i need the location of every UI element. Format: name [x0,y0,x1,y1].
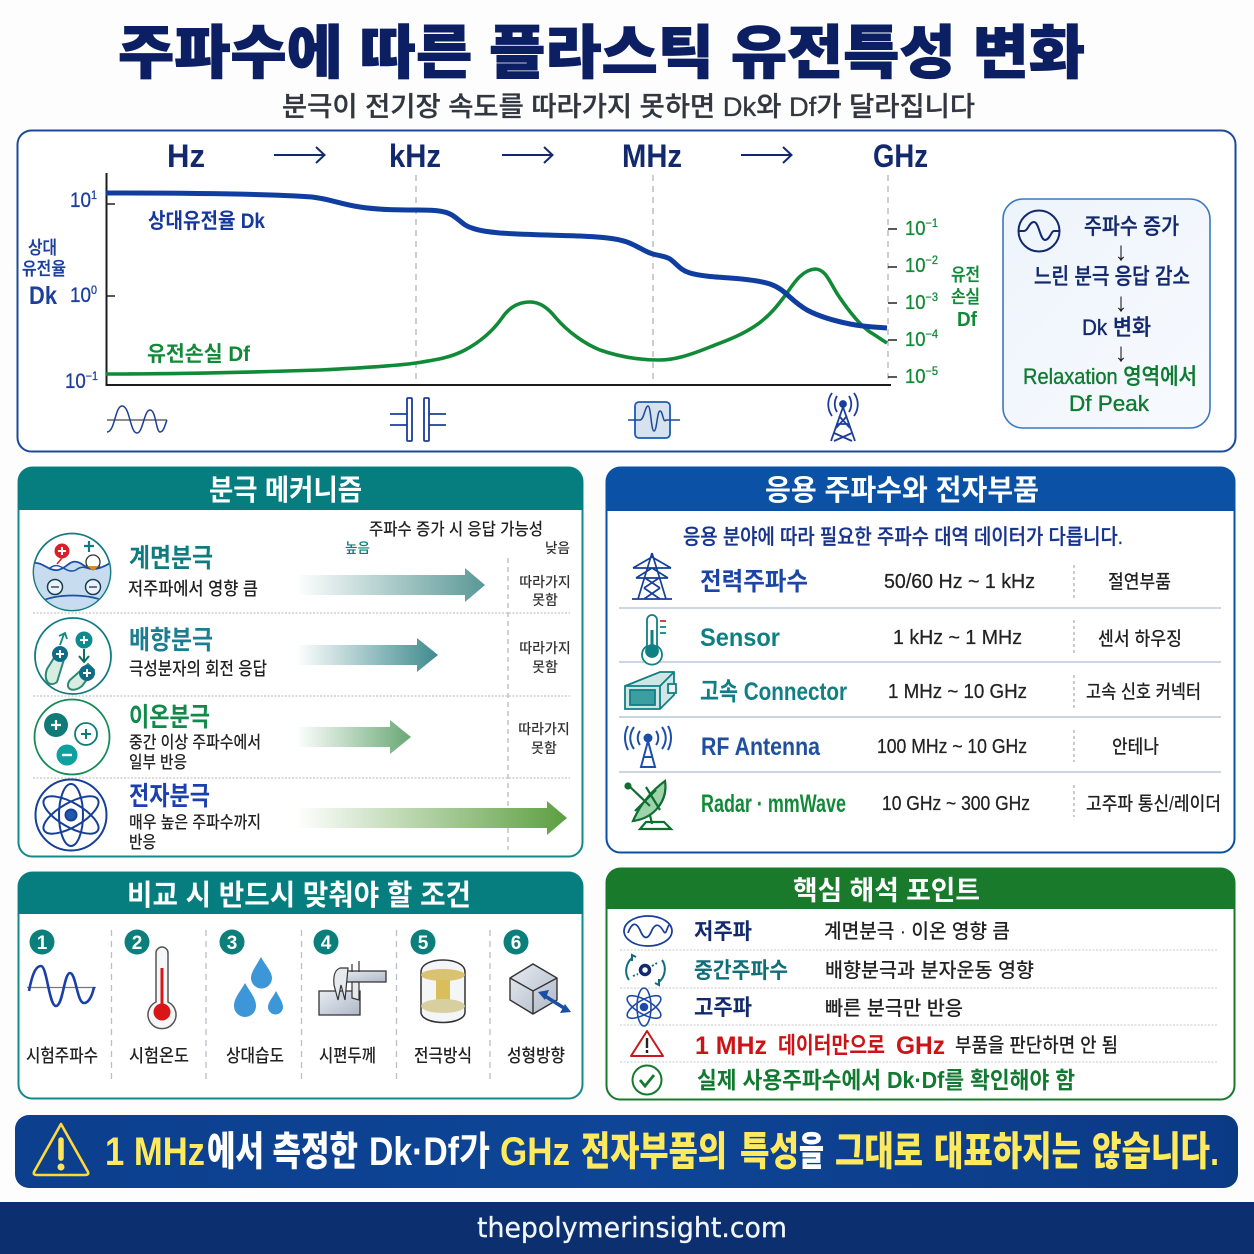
condition 6: molding direction [504,930,571,1066]
row: radar and mmWave [626,781,1221,829]
right axis labels: −1 [925,216,938,230]
left axis labels: 10 [70,284,93,307]
frequency scale header: GHz [873,138,928,174]
row: power frequency: 50/60 Hz ~ 1 kHz [884,571,1035,593]
row: RF antenna [625,726,1159,767]
response scale labels [345,520,570,556]
row: check: 실제 사용주파수에서 Dk·Df를 확인해야 함 [697,1067,1075,1093]
response scale labels: 높음 [345,540,370,556]
panel: key interpretation points [606,868,1235,1100]
row: RF antenna: 100 MHz ~ 10 GHz [877,736,1027,758]
callout: relaxation flow: ↓ [1114,236,1128,266]
right axis labels: −5 [925,364,938,378]
banner: warning message: GHz [500,1130,570,1174]
icon: filter module [628,402,680,438]
condition 3: relative humidity [220,930,284,1066]
row: connector [625,672,1201,709]
row: connector: 고속 Connector [700,678,847,706]
heading [606,467,1235,511]
condition 2: test temperature [124,930,189,1066]
icon: check circle [632,1066,662,1094]
callout: relaxation flow: ↓ [1114,337,1128,367]
icon: orientation polarization [35,618,111,694]
text: orientation polarization: 배향분극 [129,625,213,655]
condition 6: molding direction: 6 [511,933,521,954]
condition 4: specimen thickness: 4 [321,933,332,954]
left axis labels: 10 [70,189,93,212]
curve: Df [106,269,887,374]
condition 5: electrode type: 전극방식 [414,1046,472,1066]
right axis labels: 10 [905,329,927,351]
row: power frequency: 전력주파수 [700,568,808,596]
text: ionic polarization: 중간 이상 주파수에서 [129,733,261,752]
condition 1: test frequency: 1 [37,933,48,954]
icon: low frequency wave [107,406,167,433]
callout: relaxation flow: 주파수 증가 [1084,214,1179,239]
row: radar and mmWave: 고주파 통신/레이더 [1086,793,1221,815]
heading: 비교 시 반드시 맞춰야 할 조건 [127,879,471,912]
right axis labels: Df [957,309,977,331]
footer [0,1202,1254,1254]
note: cannot follow 1: 못함 [532,592,558,608]
note: cannot follow 3: 따라가지 [518,721,570,737]
icon: thermometer [642,615,666,665]
row: radar and mmWave: 10 GHz ~ 300 GHz [882,793,1030,815]
note: cannot follow 3 [518,721,570,756]
callout: relaxation flow [1003,199,1210,428]
row: low frequency [624,916,1010,946]
heading [18,872,583,914]
row: connector: 1 MHz ~ 10 GHz [888,681,1027,703]
right axis labels: 10 [905,292,927,314]
left axis labels: 유전율 [22,259,66,279]
icon: power tower [632,553,672,599]
right axis labels: −4 [925,327,938,341]
icon: connector [625,672,676,709]
callout: relaxation flow: 느린 분극 응답 감소 [1034,264,1190,289]
row: warning: 데이터만으로 [778,1032,885,1058]
response scale labels: 낮음 [545,540,570,556]
text: electronic polarization: 전자분극 [129,781,210,811]
text: interfacial polarization: 계면분극 [129,543,213,573]
curve: Dk [106,193,887,328]
condition 1: test frequency [26,930,98,1066]
icon: antenna tower [828,393,858,441]
row: RF antenna: RF Antenna [701,733,821,761]
row: sensor [642,615,1182,665]
panel: frequency chart [18,130,1236,452]
row: low frequency: 계면분극 · 이온 영향 큼 [824,920,1010,943]
right axis labels: 10 [905,218,927,240]
banner: warning message: 특성 [740,1130,799,1174]
icon: ionic polarization [34,700,110,774]
text: interfacial polarization: 저주파에서 영향 큼 [128,579,258,599]
row: mid frequency [626,955,1034,985]
panel: polarization mechanisms [18,467,583,856]
banner: warning message [15,1115,1238,1188]
right axis labels: 10 [905,366,927,388]
row: sensor: 센서 하우징 [1098,628,1182,650]
row: high frequency [624,988,963,1026]
row: warning: 부품을 판단하면 안 됨 [955,1034,1118,1057]
row: high frequency: 빠른 분극만 반응 [825,997,963,1020]
condition 3: relative humidity: 상대습도 [226,1046,284,1066]
response scale labels: 주파수 증가 시 응답 가능성 [369,520,543,539]
row: warning: 1 MHz [695,1032,767,1060]
row: warning: GHz [896,1032,945,1060]
icon: capacitor [390,398,446,441]
panel: comparison conditions [18,872,583,1098]
curve label: Df: 유전손실 Df [147,343,251,366]
icon: interfacial polarization [30,534,112,615]
banner: warning message: 대표하지는 [934,1130,1081,1174]
row: low frequency: 저주파 [694,919,752,944]
note: cannot follow 2 [519,640,571,675]
row: power frequency: 절연부품 [1108,571,1171,593]
text: ionic polarization: 이온분극 [129,702,210,732]
row: radar and mmWave: Radar · mmWave [701,790,846,818]
banner: warning message: 전자부품의 [581,1130,727,1174]
text: interfacial polarization [128,543,258,599]
banner: warning message: 을 [799,1130,824,1174]
condition 5: electrode type [410,930,472,1066]
banner: warning message: 에서 측정한 [207,1130,358,1174]
left axis labels [22,188,98,393]
frequency scale header: MHz [622,138,682,174]
callout: relaxation flow: Dk 변화 [1082,315,1151,340]
condition 3: relative humidity: 3 [227,933,237,954]
chart axes [106,173,897,385]
text: electronic polarization: 매우 높은 주파수까지 [129,813,261,832]
row: mid frequency: 중간주파수 [694,958,788,983]
frequency scale header: Hz [167,138,205,174]
note: cannot follow 2: 못함 [532,659,558,675]
heading [606,868,1235,909]
panel: application frequencies [606,467,1235,852]
right axis labels: 10 [905,255,927,277]
arrow: orientation polarization [296,638,438,672]
right axis labels: 손실 [951,287,980,307]
row: high frequency: 고주파 [694,995,752,1020]
icon: electronic polarization [36,780,106,850]
right axis labels [905,216,980,388]
curve label: Dk: 상대유전율 Dk [148,210,265,233]
arrow: electronic polarization [296,801,567,835]
condition 1: test frequency: 시험주파수 [26,1046,98,1066]
right axis labels: −3 [925,290,938,304]
right axis labels: 유전 [951,265,980,285]
left axis labels: 1 [91,188,97,202]
condition 2: test temperature: 시험온도 [129,1046,189,1066]
condition 4: specimen thickness: 시편두께 [319,1046,376,1066]
banner: warning message: 않습니다. [1092,1130,1219,1174]
heading: 응용 주파수와 전자부품 [765,474,1039,507]
row: sensor: Sensor [700,624,780,652]
icon: antenna [625,726,671,767]
icon: warning triangle [631,1031,663,1056]
left axis labels: 10 [65,370,88,393]
text: orientation polarization [129,625,267,679]
callout: relaxation flow: Relaxation 영역에서 [1023,364,1197,389]
left axis labels: −1 [86,369,98,383]
row: connector: 고속 신호 커넥터 [1086,681,1201,703]
banner: warning message: Dk·Df가 [369,1130,490,1174]
footer: thepolymerinsight.com [477,1211,787,1244]
intro text: 응용 분야에 따라 필요한 주파수 대역 데이터가 다릅니다. [683,526,1123,549]
condition 2: test temperature: 2 [132,933,142,954]
row: power frequency [632,553,1171,599]
heading: 핵심 해석 포인트 [793,876,980,906]
text: orientation polarization: 극성분자의 회전 응답 [129,659,267,679]
frequency scale header [167,138,928,174]
text: ionic polarization [129,702,261,772]
note: cannot follow 1: 따라가지 [519,574,571,590]
icon: atom [624,988,664,1026]
arrow: ionic polarization [296,720,411,754]
left axis labels: 상대 [28,238,57,258]
icon: wave ellipse [624,916,672,946]
text: electronic polarization [129,781,261,852]
row: mid frequency: 배향분극과 분자운동 영향 [825,959,1034,982]
condition 4: specimen thickness [314,930,386,1066]
title: 주파수에 따른 플라스틱 유전특성 변화 [118,21,1085,86]
subtitle: 분극이 전기장 속도를 따라가지 못하면 Dk와 Df가 달라집니다 [282,92,975,122]
left axis labels: 0 [91,283,97,297]
icon: rotation [626,955,665,985]
icon: warning triangle [34,1124,88,1175]
row: sensor: 1 kHz ~ 1 MHz [893,627,1022,649]
row: warning [631,1031,1118,1060]
note: cannot follow 3: 못함 [531,740,557,756]
frequency scale header: kHz [389,138,441,174]
arrow: interfacial polarization [296,568,485,602]
note: cannot follow 2: 따라가지 [519,640,571,656]
banner: warning message: 1 MHz [105,1130,205,1174]
banner: warning message: 그대로 [835,1130,923,1174]
callout: relaxation flow: ↓ [1114,287,1128,317]
heading [18,467,583,510]
left axis labels: Dk [29,282,57,310]
note: cannot follow 1 [519,574,571,608]
heading: 분극 메커니즘 [209,474,362,507]
icon: satellite dish [626,781,671,829]
row: RF antenna: 안테나 [1112,736,1159,758]
text: ionic polarization: 일부 반응 [129,753,187,772]
callout: relaxation flow: Df Peak [1069,391,1150,416]
condition 6: molding direction: 성형방향 [507,1046,565,1066]
right axis labels: −2 [925,253,938,267]
icon: signal circle [1018,210,1060,252]
condition 5: electrode type: 5 [418,933,429,954]
text: electronic polarization: 반응 [129,833,156,852]
